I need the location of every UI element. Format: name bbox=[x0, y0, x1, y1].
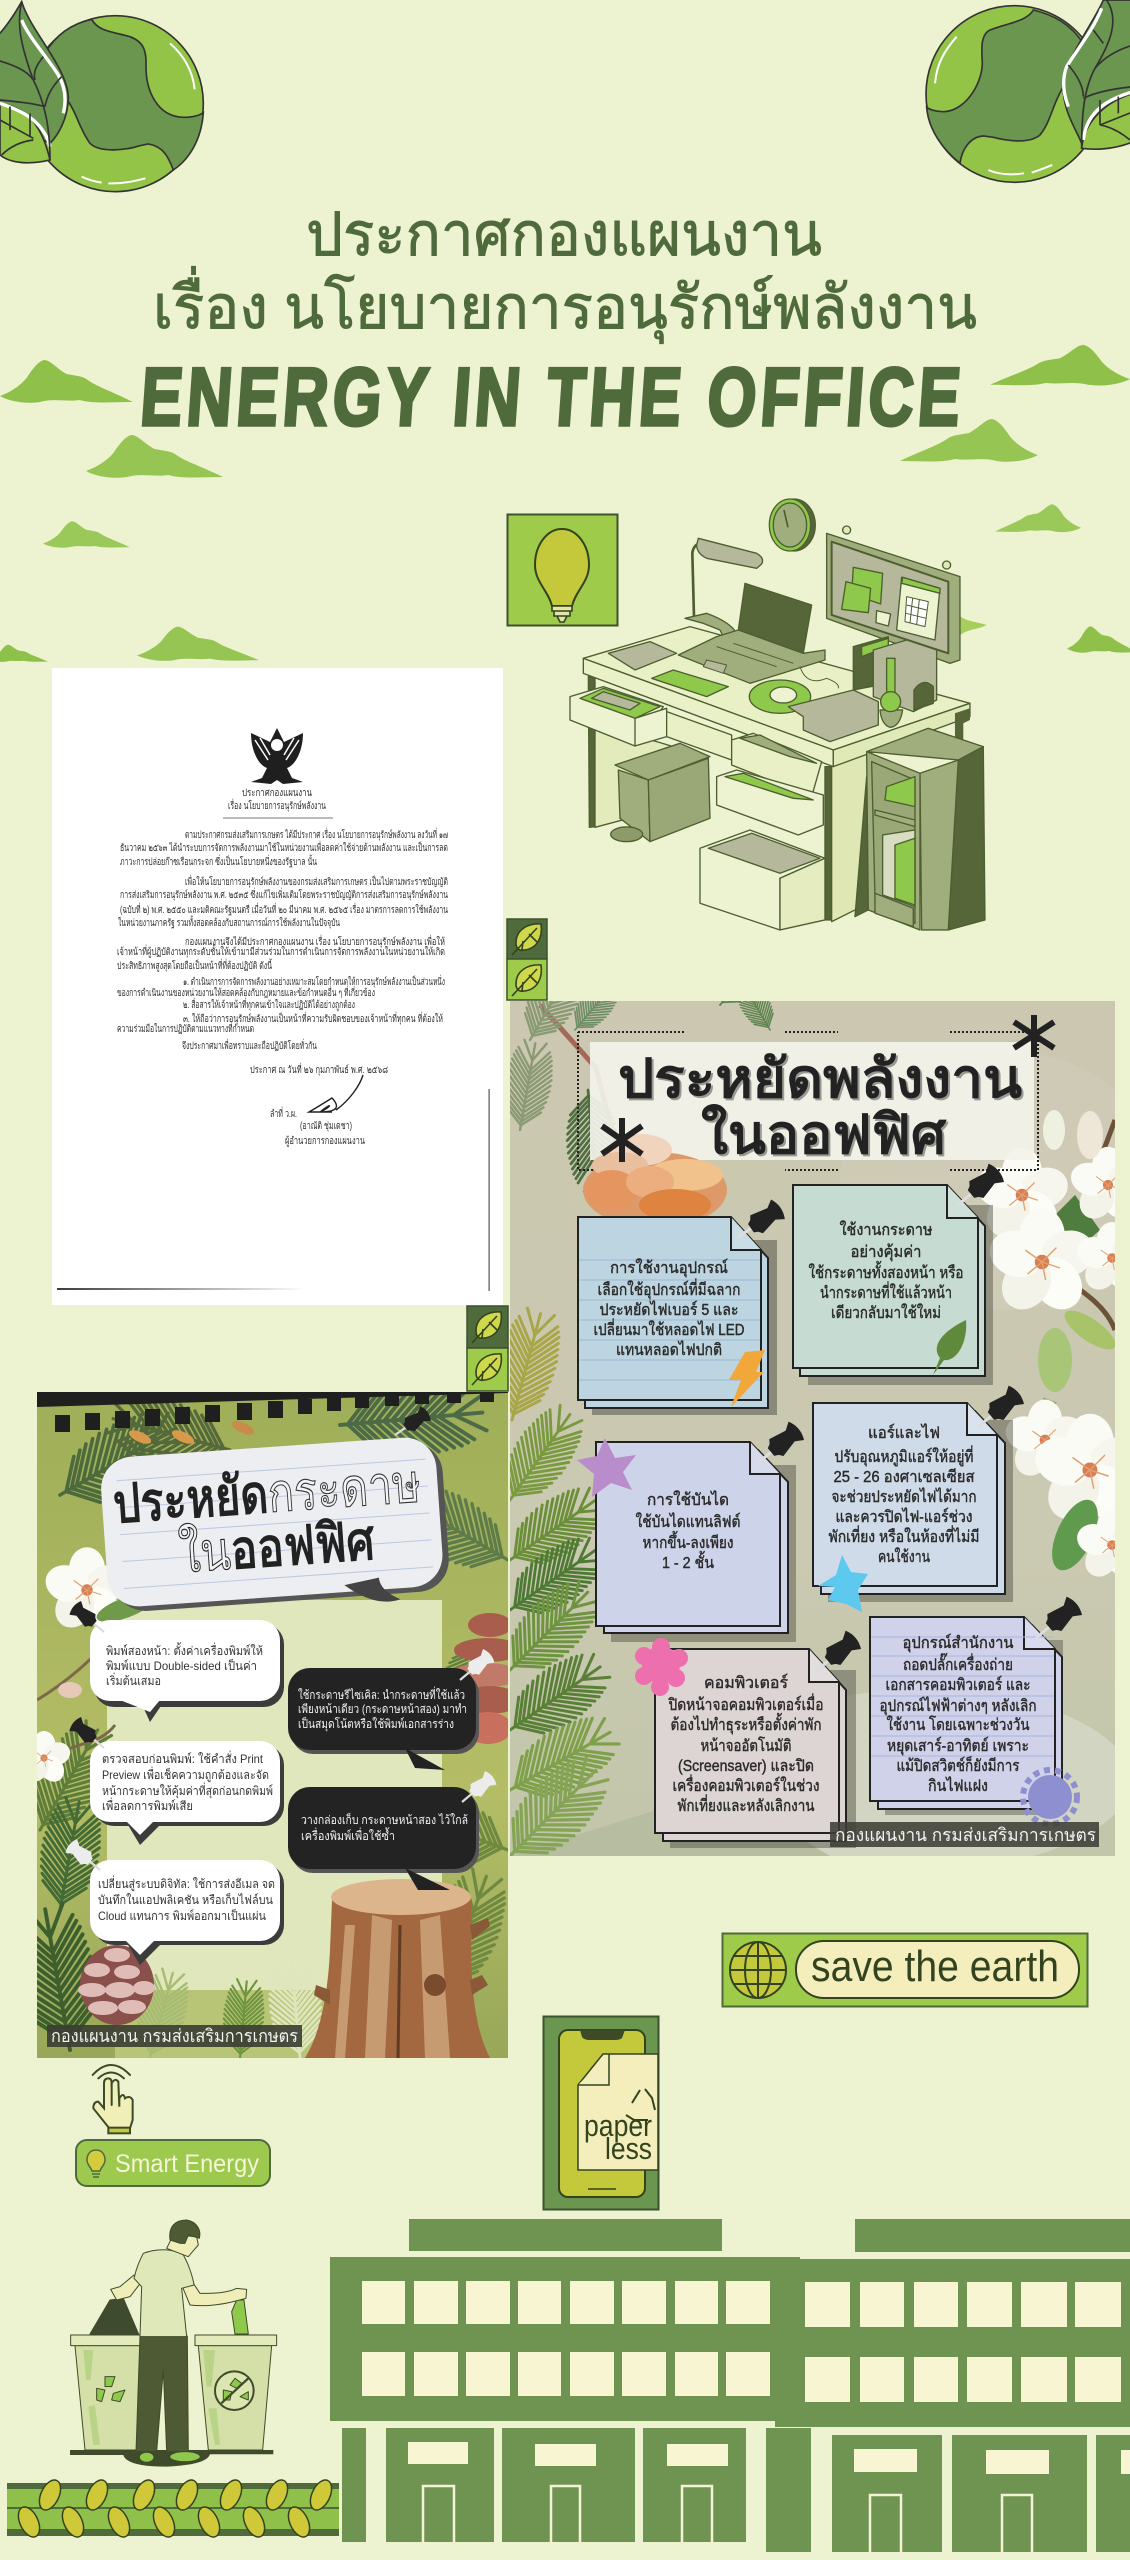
note: equipment: แทนหลอดไฟปกติ bbox=[616, 1340, 722, 1359]
note: equipment: เปลี่ยนมาใช้หลอดไฟ LED bbox=[594, 1318, 744, 1339]
note: office equipment: อุปกรณ์สำนักงาน bbox=[902, 1633, 1014, 1653]
speech bubble title: ในออฟฟิศ bbox=[177, 1510, 376, 1584]
document text: เรื่อง นโยบายการอนุรักษ์พลังงาน bbox=[228, 798, 326, 812]
illustration: office building bbox=[330, 2219, 1130, 2552]
signature bbox=[309, 1075, 363, 1112]
badge: save the earth bbox=[722, 1934, 1088, 2006]
pine fronds bbox=[9, 1376, 523, 2064]
trousers bbox=[136, 2336, 188, 2452]
note: air conditioner and lights bbox=[813, 1384, 1026, 1612]
black bag bbox=[90, 2298, 139, 2335]
bubble: recycled paper: เป็นสมุดโน้ตหรือใช้พิมพ์เอกสารร่าง bbox=[298, 1716, 454, 1732]
note: equipment: การใช้งานอุปกรณ์ bbox=[610, 1258, 728, 1278]
document text: ความร่วมมือในการปฏิบัติตามแนวทางที่กำหนด bbox=[117, 1021, 254, 1035]
drawers bbox=[570, 687, 825, 930]
pine branches bbox=[485, 943, 782, 1878]
note: stairs: การใช้บันได bbox=[647, 1490, 729, 1509]
shoes bbox=[139, 2452, 200, 2462]
document text: การส่งเสริมการอนุรักษ์พลังงาน พ.ศ. ๒๕๓๕ ซึ่งแก้ไขเพิ่มเติมโดยพระราชบัญญัติการส่งเสริมการอนุรักษ์พลังงาน bbox=[120, 887, 448, 901]
note: office equipment: อุปกรณ์ไฟฟ้าต่างๆ หลังเลิก bbox=[880, 1696, 1036, 1716]
icon: leaf tiles lower pair bbox=[467, 1306, 508, 1391]
bubble: keep box near printer: วางกล่องเก็บ กระดาษหน้าสอง ไว้ใกล้ bbox=[301, 1812, 468, 1827]
note: air conditioner and lights: ปรับอุณหภูมิแอร์ให้อยู่ที่ bbox=[834, 1445, 974, 1467]
bubble: double sided: พิมพ์สองหน้า: ตั้งค่าเครื่องพิมพ์ให้ bbox=[106, 1642, 263, 1658]
trash bin bbox=[611, 743, 710, 842]
decorative leaf strip bbox=[7, 2477, 339, 2540]
stump bbox=[305, 1879, 490, 2058]
document text: (อาณัติ ชุ่มเดชา) bbox=[300, 1121, 352, 1132]
title: Thai headline bbox=[153, 201, 977, 344]
shirt bbox=[134, 2250, 194, 2337]
recycle symbol bbox=[626, 2089, 655, 2120]
document text: ภาวะการปล่อยก๊าซเรือนกระจก ซึ่งเป็นนโยบายหนึ่งของรัฐบาล นั้น bbox=[120, 854, 317, 868]
document text: เจ้าหน้าที่ผู้ปฏิบัติงานทุกระดับชั้นให้เข้ามามีส่วนร่วมในการดำเนินการจัดการพลังงานในหน่วยงานให้เกิด bbox=[117, 944, 445, 958]
document text: ลำที่ ว.ผ. bbox=[270, 1106, 297, 1120]
title: Thai headline: ประกาศกองแผนงาน bbox=[306, 201, 822, 268]
bubble: check before printing: หน้ากระดาษให้คุ้มค่าที่สุดก่อนกดพิมพ์ bbox=[102, 1782, 273, 1799]
badge: Smart Energy: Smart Energy bbox=[115, 2150, 259, 2178]
laptop bbox=[678, 583, 825, 683]
bubble: recycled paper: เพียงหน้าเดียว (กระดาษหน้าสอง) มาทำ bbox=[298, 1702, 467, 1716]
note: stairs: 1 - 2 ชั้น bbox=[662, 1551, 714, 1572]
bubble: double sided: เริ่มต้นเสมอ bbox=[106, 1672, 161, 1688]
panel: announcement document bbox=[52, 668, 503, 1305]
note: computer: หน้าจออัตโนมัติ bbox=[700, 1736, 792, 1755]
desk lamp bbox=[685, 538, 763, 637]
panel: save paper poster bbox=[37, 1392, 508, 2058]
title box: ประหยัดพลังงาน bbox=[620, 1051, 1024, 1111]
title box: ในออฟฟิศ bbox=[703, 1105, 949, 1167]
desk body bbox=[583, 627, 970, 922]
note: stairs bbox=[577, 1420, 806, 1642]
note: office equipment: ถอดปลั๊กเครื่องถ่าย bbox=[903, 1653, 1013, 1674]
title text: ประหยัดกระดาษ bbox=[111, 1454, 423, 1535]
bubble: go digital: เปลี่ยนสู่ระบบดิจิทัล: ใช้การส่งอีเมล จด bbox=[98, 1875, 275, 1892]
push pins bbox=[64, 1405, 498, 1877]
note: computer: เครื่องคอมพิวเตอร์ในช่วง bbox=[672, 1774, 820, 1795]
icon: garuda emblem bbox=[251, 728, 303, 784]
note: computer: ต้องไปทำธุระหรือตั้งค่าพัก bbox=[670, 1713, 822, 1735]
head bbox=[167, 2220, 200, 2257]
decorative clouds bbox=[0, 345, 1130, 662]
bubble: check before printing: Preview เพื่อเช็คความถูกต้องและจัด bbox=[102, 1766, 269, 1783]
note: paper: ใช้กระดาษทั้งสองหน้า หรือ bbox=[808, 1261, 964, 1282]
note: paper bbox=[793, 1162, 1006, 1385]
ground shadow bbox=[70, 2450, 273, 2467]
title box: ประหยัดพลังงาน bbox=[618, 1049, 1022, 1109]
icon: leaf tiles upper pair bbox=[507, 919, 547, 1000]
bubble: check before printing bbox=[90, 1741, 284, 1845]
note: office equipment: เอกสารคอมพิวเตอร์ และ bbox=[886, 1675, 1030, 1694]
orange pine cone bbox=[583, 1134, 727, 1216]
notice board bbox=[827, 526, 960, 663]
document text: ในหน่วยงานภาครัฐ รวมทั้งสอดคล้องกับสถานการณ์การใช้พลังงานในปัจจุบัน bbox=[118, 915, 340, 929]
note: equipment bbox=[578, 1198, 787, 1415]
spiral binding bbox=[37, 1392, 508, 1432]
document text: ๓. ให้ถือว่าการอนุรักษ์พลังงานเป็นหน้าที่ความรับผิดชอบของเจ้าหน้าที่ทุกคน ที่ต้องให้ bbox=[183, 1011, 443, 1025]
note: computer: พักเที่ยงและหลังเลิกงาน bbox=[678, 1794, 815, 1815]
note: paper: อย่างคุ้มค่า bbox=[850, 1243, 922, 1262]
doors bbox=[423, 2486, 1032, 2552]
note: office equipment: หยุดเสาร์-อาทิตย์ เพราะ bbox=[887, 1736, 1029, 1756]
note: computer: (Screensaver) และปิด bbox=[678, 1758, 814, 1775]
note: stairs: หากขึ้น-ลงเพียง bbox=[642, 1531, 734, 1552]
badge: save the earth: save the earth bbox=[811, 1942, 1059, 1991]
note: air conditioner and lights: และควรปิดไฟ-แอร์ช่วง bbox=[836, 1507, 972, 1526]
bubble: keep box near printer: เครื่องพิมพ์เพื่อใช้ซ้ำ bbox=[301, 1827, 395, 1843]
note: office equipment: ใช้งาน โดยเฉพาะช่วงวัน bbox=[886, 1715, 1030, 1734]
bubble: double sided bbox=[90, 1620, 284, 1722]
document text: ประกาศ ณ วันที่ ๒๖ กุมภาพันธ์ พ.ศ. ๒๕๖๘ bbox=[250, 1062, 388, 1076]
cloud behind board bbox=[960, 616, 987, 635]
bubble: check before printing: เพื่อลดการพิมพ์เสีย bbox=[102, 1797, 193, 1813]
asterisk bbox=[602, 1118, 642, 1162]
icon: globe bbox=[730, 1942, 786, 1998]
windows bbox=[362, 2281, 1130, 2474]
document text: ประสิทธิภาพสูงสุดโดยถือเป็นหน้าที่ที่ต้องปฏิบัติ ดังนี้ bbox=[117, 958, 272, 972]
document text: ผู้อำนวยการกองแผนงาน bbox=[285, 1135, 365, 1147]
bubble: go digital: Cloud แทนการ พิมพ์ออกมาเป็นแผ่น bbox=[98, 1908, 266, 1923]
icon: globe with leaves top right bbox=[926, 0, 1130, 182]
document text: (ฉบับที่ ๒) พ.ศ. ๒๕๕๐ และมติคณะรัฐมนตรี เมื่อวันที่ ๒๐ มีนาคม พ.ศ. ๒๕๖๕ เรื่อง มาตรการลดการใช้พลังงาน bbox=[120, 902, 448, 916]
books on desk bbox=[853, 637, 937, 727]
title box bbox=[578, 1015, 1054, 1170]
white flowers bbox=[980, 1110, 1115, 1577]
document text: ๑. ดำเนินการการจัดการพลังงานอย่างเหมาะสมโดยกำหนดให้การอนุรักษ์พลังงานเป็นส่วนหนึ่ง bbox=[183, 974, 445, 988]
note: equipment: เลือกใช้อุปกรณ์ที่มีฉลาก bbox=[598, 1278, 740, 1300]
note: office equipment: แม้ปิดสวิตช์ก็ยังมีการ bbox=[896, 1755, 1020, 1775]
document text: ธันวาคม ๒๕๖๓ ได้นำระบบการจัดการพลังงานมาใช้ในหน่วยงานเพื่อลดค่าใช้จ่ายด้านพลังงาน และเป็นการลด bbox=[120, 840, 448, 854]
document text: ตามประกาศกรมส่งเสริมการเกษตร ได้มีประกาศ เรื่อง นโยบายการอนุรักษ์พลังงาน ลงวันที่ ๑๗ bbox=[185, 827, 448, 841]
bubble: go digital: บันทึกในแอปพลิเคชัน หรือเก็บไฟล์บน bbox=[98, 1892, 273, 1907]
desk items bbox=[608, 642, 878, 742]
panel: save energy in the office poster bbox=[510, 1001, 1115, 1856]
icon: touch hand bbox=[93, 2065, 133, 2133]
footer label: กองแผนงาน กรมส่งเสริมการเกษตร bbox=[835, 1825, 1096, 1845]
note: paper: ใช้งานกระดาษ bbox=[840, 1220, 932, 1239]
storage cabinet bbox=[855, 728, 985, 930]
pine cone right bbox=[454, 1613, 508, 1744]
badge: Smart Energy bbox=[76, 2140, 270, 2186]
note: paper: นำกระดาษที่ใช้แล้วหน้า bbox=[820, 1281, 952, 1302]
document text: กองแผนงานจึงได้มีประกาศกองแผนงาน เรื่อง นโยบายการอนุรักษ์พลังงาน เพื่อให้ bbox=[185, 934, 445, 948]
bubble: double sided: พิมพ์แบบ Double-sided เป็นค่า bbox=[106, 1658, 257, 1673]
illustration: office desk bbox=[570, 499, 987, 930]
icon: light bulb tile bbox=[508, 514, 618, 626]
bubble: go digital bbox=[90, 1860, 284, 1965]
bubble: recycled paper: ใช้กระดาษรีไซเคิล: นำกระดาษที่ใช้แล้ว bbox=[298, 1686, 465, 1702]
bottle bbox=[232, 2300, 248, 2334]
flower and branch bbox=[37, 1547, 142, 1782]
illustration: person sorting recycling bbox=[70, 2220, 277, 2467]
arms bbox=[111, 2275, 247, 2306]
document text: ของการดำเนินงานของหน่วยงานให้สอดคล้องกับกฎหมายและข้อกำหนดอื่น ๆ ที่เกี่ยวข้อง bbox=[117, 985, 375, 999]
speech bubble title bbox=[99, 1435, 451, 1621]
icon: paperless phone: paper bbox=[584, 2108, 652, 2143]
note: computer: ปิดหน้าจอคอมพิวเตอร์เมื่อ bbox=[668, 1693, 824, 1714]
note: equipment: ประหยัดไฟเบอร์ 5 และ bbox=[600, 1300, 738, 1319]
note: paper: เดียวกลับมาใช้ใหม่ bbox=[831, 1303, 941, 1322]
document text: ประกาศกองแผนงาน bbox=[242, 788, 312, 799]
pine cone bottom left bbox=[78, 1945, 155, 2025]
note: computer bbox=[635, 1629, 863, 1848]
document text: จึงประกาศมาเพื่อทราบและถือปฏิบัติโดยทั่วกัน bbox=[182, 1038, 317, 1052]
document text bbox=[117, 788, 448, 1147]
note: air conditioner and lights: คนใช้งาน bbox=[878, 1547, 930, 1566]
wall clock bbox=[769, 499, 815, 551]
note: stairs: ใช้บันไดแทนลิฟต์ bbox=[636, 1512, 740, 1531]
note: air conditioner and lights: พักเที่ยง หรือในห้องที่ไม่มี bbox=[828, 1525, 980, 1546]
title box: ในออฟฟิศ bbox=[701, 1103, 947, 1165]
note: air conditioner and lights: แอร์และไฟ bbox=[868, 1423, 940, 1442]
icon: globe with leaves top left bbox=[0, 2, 203, 192]
title: ENERGY IN THE OFFICE: ENERGY IN THE OFFICE bbox=[138, 352, 968, 443]
document text: ๒. สื่อสารให้เจ้าหน้าที่ทุกคนเข้าใจและปฏิบัติได้อย่างถูกต้อง bbox=[183, 997, 355, 1011]
note: computer: คอมพิวเตอร์ bbox=[704, 1673, 788, 1692]
note: air conditioner and lights: จะช่วยประหยัดไฟได้มาก bbox=[832, 1487, 976, 1506]
right bin bbox=[195, 2335, 277, 2450]
bubble: check before printing: ตรวจสอบก่อนพิมพ์: ใช้คำสั่ง Print bbox=[102, 1750, 264, 1766]
bubble: keep box near printer bbox=[288, 1787, 479, 1890]
note: office equipment bbox=[870, 1595, 1084, 1824]
document text: เพื่อให้นโยบายการอนุรักษ์พลังงานของกรมส่งเสริมการเกษตร เป็นไปตามพระราชบัญญัติ bbox=[185, 874, 448, 888]
title: Thai headline: เรื่อง นโยบายการอนุรักษ์พลังงาน bbox=[153, 266, 977, 344]
icon: paperless phone: less bbox=[605, 2131, 652, 2166]
note: air conditioner and lights: 25 - 26 องศาเซลเซียส bbox=[834, 1468, 975, 1486]
bubble: recycled paper bbox=[288, 1668, 479, 1770]
left bin bbox=[71, 2335, 140, 2450]
footer label: กองแผนงาน กรมส่งเสริมการเกษตร bbox=[51, 2026, 298, 2046]
note: office equipment: กินไฟแฝง bbox=[928, 1776, 988, 1795]
icon: paperless phone bbox=[544, 2016, 658, 2210]
